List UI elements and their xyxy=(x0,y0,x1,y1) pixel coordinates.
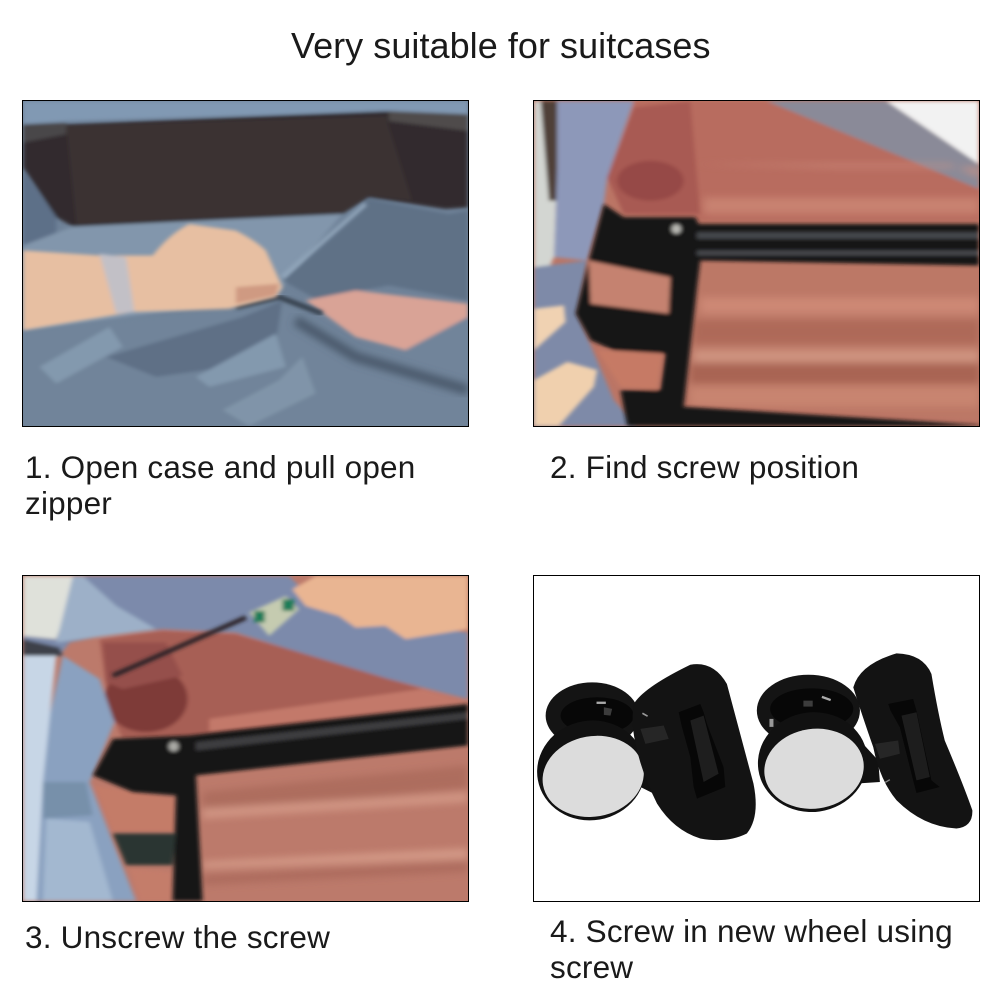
photo 3: unscrewing the screw xyxy=(22,575,469,902)
photo 1: opening the suitcase lining zipper xyxy=(22,100,469,427)
arm and hand xyxy=(23,224,282,330)
caption 1: 1. Open case and pull open xyxy=(25,449,416,485)
caption 3: 3. Unscrew the screw xyxy=(25,919,330,955)
title: Very suitable for suitcases xyxy=(291,25,711,66)
icon: left wheel pair xyxy=(529,664,756,840)
caption 2: 2. Find screw position xyxy=(550,449,859,485)
bracket and rail xyxy=(93,704,468,901)
photo 4: replacement wheels xyxy=(533,575,980,902)
caption 4: screw xyxy=(550,949,633,985)
caption 1 xyxy=(25,449,416,521)
icon: right wheel pair xyxy=(751,653,972,829)
screwdriver xyxy=(113,596,299,676)
fingers xyxy=(534,305,597,426)
photo 2: screw position on the wheel bracket xyxy=(533,100,980,427)
caption 4 xyxy=(550,913,953,985)
wheel bracket and rail xyxy=(576,204,979,426)
caption 4: 4. Screw in new wheel using xyxy=(550,913,953,949)
caption 1: zipper xyxy=(25,485,112,521)
